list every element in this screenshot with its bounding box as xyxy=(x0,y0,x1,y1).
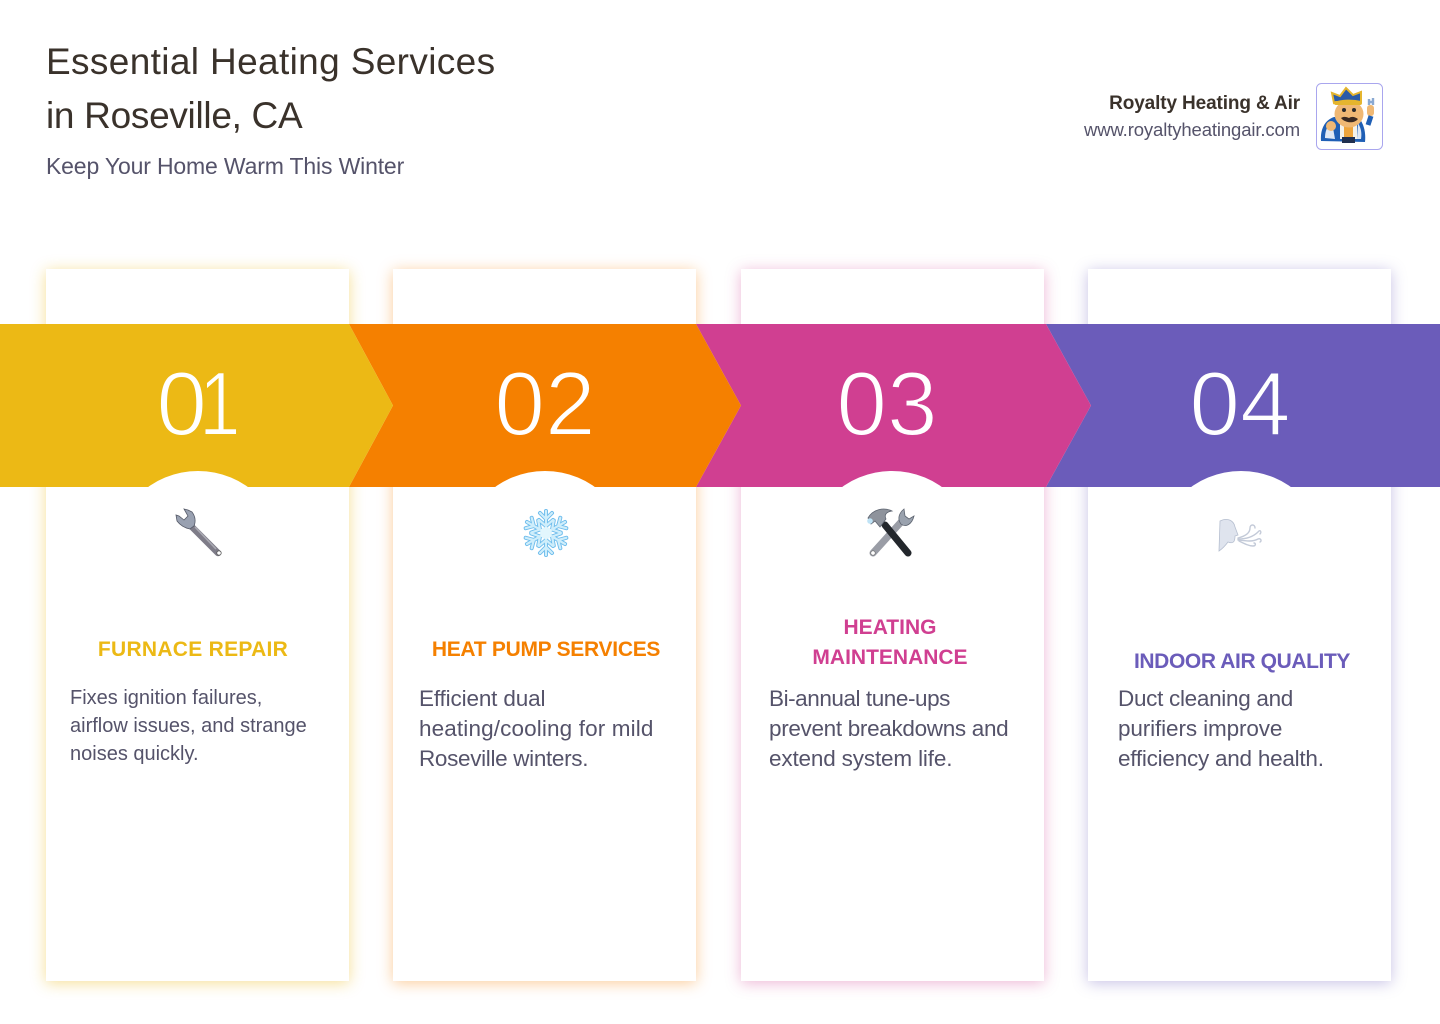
heading: FURNACE REPAIR xyxy=(98,638,288,661)
icon: wrench xyxy=(176,508,222,556)
title xyxy=(46,41,495,136)
number 01: 1 xyxy=(199,354,234,455)
description xyxy=(419,686,654,771)
chevron band xyxy=(0,324,1440,487)
description: Roseville winters. xyxy=(419,746,588,771)
number 02: 02 xyxy=(494,354,596,455)
description: Duct cleaning and xyxy=(1118,686,1293,711)
description: Bi-annual tune-ups xyxy=(769,686,950,711)
number 04: 04 xyxy=(1189,354,1291,455)
icon: wind face xyxy=(1218,519,1262,552)
title: in Roseville, CA xyxy=(46,95,302,136)
heading: MAINTENANCE xyxy=(812,646,968,669)
heading: HEATING xyxy=(844,616,936,639)
heading: HEAT PUMP SERVICES xyxy=(432,638,660,661)
icon: snowflake xyxy=(524,509,568,557)
panel: heating maintenance xyxy=(741,269,1044,981)
description: noises quickly. xyxy=(70,743,199,765)
chevron 2: orange xyxy=(349,324,741,487)
description: airflow issues, and strange xyxy=(70,715,307,737)
number 01 xyxy=(156,354,236,455)
description: extend system life. xyxy=(769,746,952,771)
chevron 3: magenta xyxy=(696,324,1091,487)
arc cutout xyxy=(112,471,284,643)
description: heating/cooling for mild xyxy=(419,716,654,741)
chevron 4: purple xyxy=(1046,324,1440,487)
chevron 1: yellow xyxy=(0,324,393,487)
company name: Royalty Heating & Air xyxy=(1109,93,1300,114)
description: purifiers improve xyxy=(1118,716,1282,741)
number 03: 03 xyxy=(836,354,938,455)
description xyxy=(769,686,1008,771)
icon: hammer and wrench xyxy=(867,508,915,556)
number 01: 0 xyxy=(156,354,199,455)
title: Essential Heating Services xyxy=(46,41,495,82)
description: efficiency and health. xyxy=(1118,746,1324,771)
description: Fixes ignition failures, xyxy=(70,687,262,709)
description: prevent breakdowns and xyxy=(769,716,1008,741)
arc cutout xyxy=(806,471,978,643)
logo: king mascot xyxy=(1316,83,1383,150)
heading: INDOOR AIR QUALITY xyxy=(1134,650,1350,673)
description xyxy=(70,687,307,765)
panel: indoor air quality xyxy=(1088,269,1391,981)
panel: heat pump services xyxy=(393,269,696,981)
description xyxy=(1118,686,1324,771)
arc cutout xyxy=(1155,471,1327,643)
heading xyxy=(812,616,968,669)
panel: furnace repair xyxy=(46,269,349,981)
description: Efficient dual xyxy=(419,686,545,711)
arc cutout xyxy=(459,471,631,643)
company website: www.royaltyheatingair.com xyxy=(1084,119,1300,140)
subtitle: Keep Your Home Warm This Winter xyxy=(46,153,404,179)
